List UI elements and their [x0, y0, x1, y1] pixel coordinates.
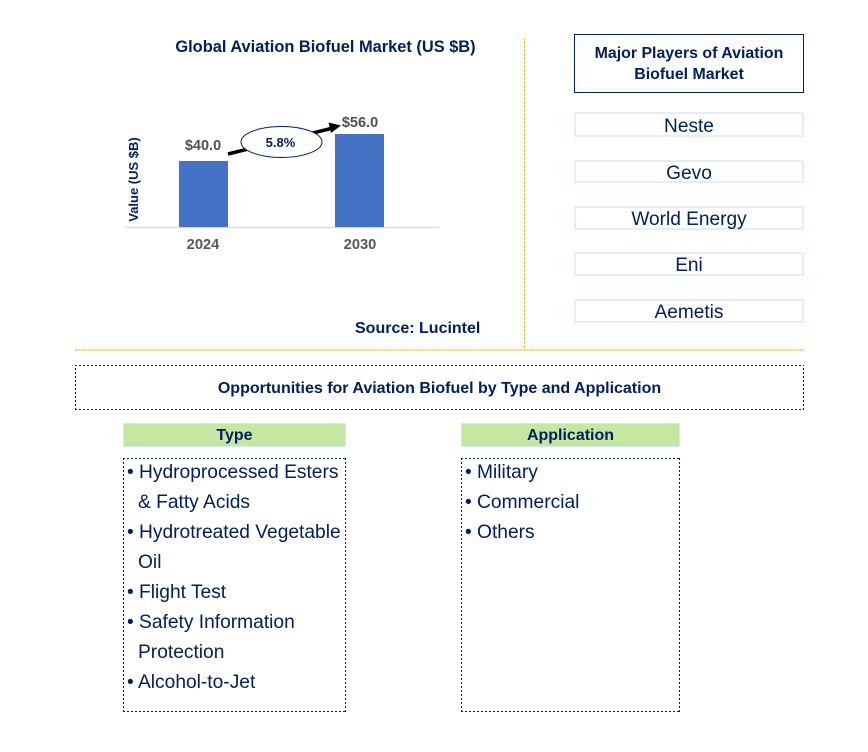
players heading: Major Players of Aviation	[595, 45, 783, 62]
opportunities heading: Opportunities for Aviation Biofuel by Type and Application	[218, 380, 661, 397]
type item: Safety Information Protection: • Safety Information	[127, 612, 295, 633]
players heading: Biofuel Market	[634, 66, 744, 83]
axis baseline	[125, 226, 439, 228]
application heading: Application	[527, 427, 614, 444]
source note: Source: Lucintel	[355, 320, 480, 337]
application item: Commercial: • Commercial	[465, 492, 579, 513]
value label: 2024: $40.0	[185, 138, 221, 154]
players heading	[574, 34, 804, 93]
CAGR ellipse	[241, 126, 322, 158]
chart title: Global Aviation Biofuel Market (US $B)	[175, 38, 476, 56]
type heading	[123, 423, 346, 447]
horizontal divider	[75, 349, 804, 351]
type item: Hydroprocessed Esters & Fatty Acids: • Hydroprocessed Esters	[127, 462, 338, 483]
bar: 2024	[179, 161, 228, 227]
player: Aemetis: Aemetis	[654, 302, 723, 323]
application list	[461, 458, 680, 712]
year label: 2024: 2024	[187, 237, 220, 253]
player: Eni	[574, 252, 804, 276]
vertical divider	[524, 38, 525, 348]
player: World Energy: World Energy	[631, 209, 747, 230]
value label: 2030: $56.0	[342, 115, 378, 131]
type item: Flight Test: • Flight Test	[127, 582, 226, 603]
player: Gevo	[574, 160, 804, 183]
type item continuation: Oil	[138, 552, 161, 573]
type item continuation: Protection	[138, 642, 224, 663]
application item: Military: • Military	[465, 462, 538, 483]
player: Eni: Eni	[675, 255, 703, 276]
player: Neste: Neste	[664, 116, 714, 137]
type item: Alcohol-to-Jet: • Alcohol-to-Jet	[127, 672, 255, 693]
CAGR ellipse: 5.8%	[266, 135, 296, 150]
growth arrow	[228, 122, 341, 154]
bar: 2030	[335, 134, 384, 227]
player: Gevo: Gevo	[666, 163, 712, 184]
type item: Hydrotreated Vegetable Oil: • Hydrotreated Vegetable	[127, 522, 341, 543]
type heading: Type	[216, 427, 253, 444]
bar chart	[125, 115, 439, 253]
player: Aemetis	[574, 299, 804, 323]
year label: 2030: 2030	[344, 237, 376, 253]
type list	[123, 458, 346, 712]
y axis label: Value (US $B)	[126, 137, 141, 222]
type item continuation: & Fatty Acids	[138, 492, 250, 513]
application heading	[461, 423, 680, 447]
player: World Energy	[574, 206, 804, 230]
player: Neste	[574, 112, 804, 137]
opportunities heading	[75, 365, 804, 410]
application item: Others: • Others	[465, 522, 535, 543]
